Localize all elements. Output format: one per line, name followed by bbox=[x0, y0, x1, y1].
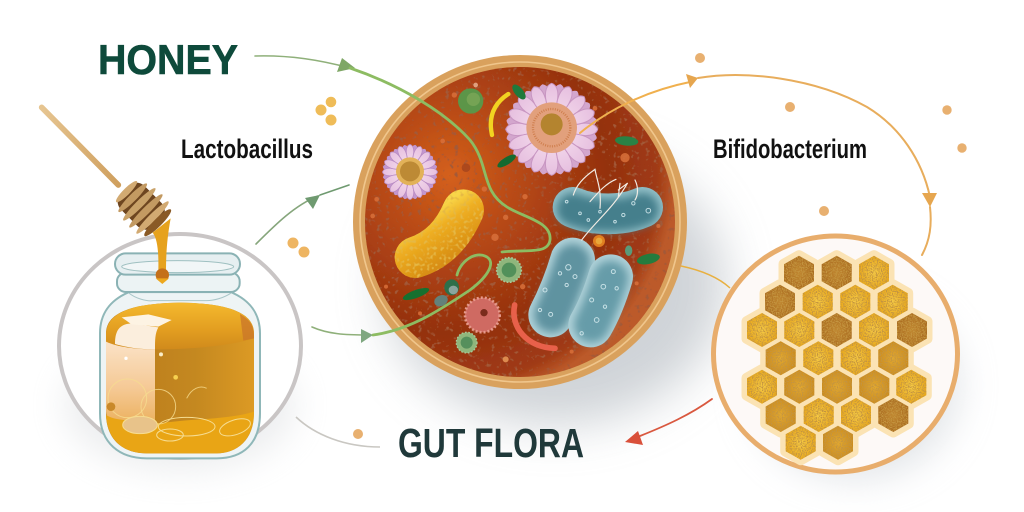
pink spiky microbe bbox=[465, 298, 500, 332]
arrow: disc to honeycomb yellow bbox=[681, 266, 730, 288]
decorative orange dots bbox=[288, 53, 967, 439]
blue bacterium top bbox=[573, 207, 643, 215]
surface bubbles bbox=[370, 83, 660, 362]
arrow: honeycomb to gut flora bbox=[625, 399, 712, 445]
yellow bacterium bbox=[415, 210, 463, 257]
arrow: jar to disc lower bbox=[312, 255, 491, 343]
label: Lactobacillus: Lactobacillus bbox=[181, 134, 313, 164]
blue bacterium right bbox=[591, 277, 611, 325]
blue bacterium left bbox=[551, 260, 573, 315]
white flagella bbox=[573, 169, 637, 240]
arrow: disc to bifidobacterium orange bbox=[580, 74, 937, 255]
title: HONEY: HONEY bbox=[98, 36, 238, 83]
green balls bbox=[456, 88, 521, 353]
label: Bifidobacterium: Bifidobacterium bbox=[713, 134, 867, 164]
icon: jar of honey bbox=[100, 253, 260, 458]
disc surface bbox=[365, 67, 675, 377]
red rod bbox=[514, 305, 555, 348]
small flower bbox=[350, 112, 470, 232]
panel: gut flora disc bbox=[350, 30, 687, 389]
comb backing bbox=[747, 256, 927, 460]
arrow: gut flora to jar bbox=[296, 417, 380, 447]
comb cells bbox=[747, 256, 927, 460]
jar ring bbox=[59, 234, 301, 458]
honeycomb ring bbox=[714, 236, 958, 472]
arrow: honey to disc bbox=[255, 56, 550, 252]
bacterium spots bbox=[538, 200, 651, 335]
arrow: jar to disc upper bbox=[256, 185, 349, 244]
orange ball bbox=[593, 235, 605, 247]
disc rim bbox=[353, 55, 687, 389]
panel: honey jar bbox=[42, 107, 301, 458]
title: GUT FLORA: GUT FLORA bbox=[398, 420, 584, 466]
large flower bbox=[452, 30, 651, 229]
icon: honey dipper bbox=[42, 107, 177, 284]
yellow rod bbox=[491, 94, 508, 135]
panel: honeycomb bbox=[714, 236, 958, 472]
microbes bbox=[350, 30, 661, 362]
background shadows bbox=[65, 145, 960, 480]
leaves bbox=[401, 82, 661, 308]
